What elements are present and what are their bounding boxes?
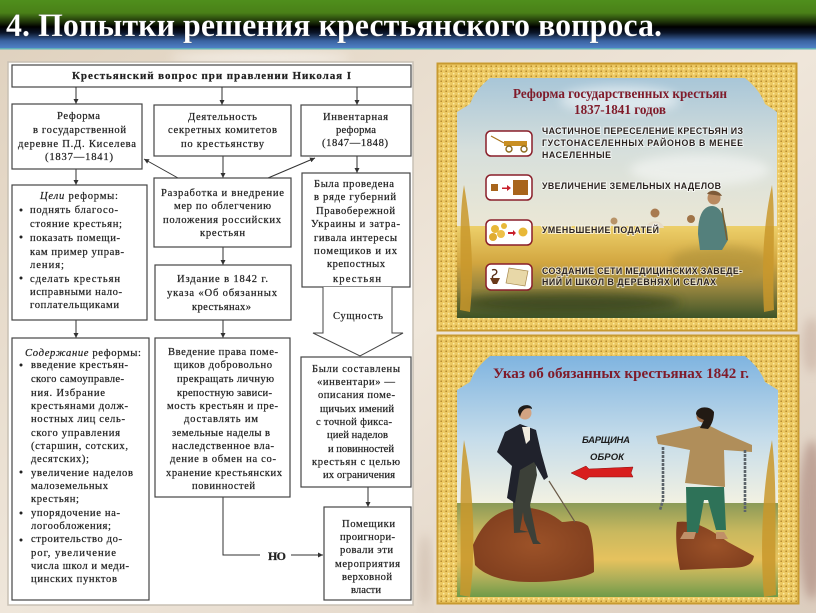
panel title: Указ об обязанных крестьянах 1842 г. bbox=[493, 366, 749, 382]
box: landlords' right: крепостную зависи- bbox=[177, 388, 272, 399]
box: landlords' right: повинностей bbox=[192, 481, 255, 492]
box: reform content: цинских пунктов bbox=[31, 574, 117, 585]
label: corvee and quitrent bbox=[582, 435, 630, 463]
diagram title: Крестьянский вопрос при правлении Николая I bbox=[72, 70, 351, 82]
frame corners and wheat bbox=[457, 356, 778, 597]
box: Kiselev reform: деревне П.Д. Киселева bbox=[18, 139, 136, 150]
box: landlords ignored bbox=[324, 507, 411, 600]
box: secret committees: Деятельность bbox=[188, 112, 257, 123]
diagram title bbox=[12, 65, 411, 87]
item: resettlement bbox=[486, 126, 743, 160]
soil plot: landlord bbox=[473, 508, 594, 582]
box: landlords ignored: верховной bbox=[342, 572, 392, 583]
box: landlords' right: дение в обмен на со- bbox=[170, 454, 276, 465]
label: but: НО bbox=[268, 549, 286, 563]
box: reform content: крестьян; bbox=[31, 494, 79, 505]
box: landlords' right bbox=[155, 338, 290, 497]
box: reform goals: ления; bbox=[30, 260, 64, 271]
box: secret committees: секретных комитетов bbox=[168, 125, 277, 136]
item: lower taxes bbox=[486, 220, 659, 245]
box: landlords' right: прекращать личную bbox=[177, 374, 274, 385]
box: inventories: Были составлены bbox=[312, 364, 400, 375]
box: 1842 decree: Издание в 1842 г. bbox=[177, 274, 268, 285]
item: hospitals and schools bbox=[486, 264, 742, 290]
box: Kiselev reform bbox=[12, 104, 142, 169]
box: carried out in provinces: гивала интересы bbox=[314, 233, 397, 244]
box: reform content: ского самоуправле- bbox=[31, 374, 124, 385]
box: reform content: ния. Избрание bbox=[31, 388, 105, 399]
box: 1842 decree: указа «Об обязанных bbox=[167, 288, 278, 299]
box: reform goals: показать помещи- bbox=[30, 233, 120, 244]
item: hospitals and schools: СОЗДАНИЕ СЕТИ МЕДИЦИНСКИХ ЗАВЕДЕ- bbox=[542, 266, 742, 276]
arrow: essence bbox=[313, 287, 403, 356]
item: lower taxes: УМЕНЬШЕНИЕ ПОДАТЕЙ bbox=[542, 224, 659, 235]
box: inventory reform: Инвентарная bbox=[323, 112, 388, 123]
frame corners and wheat bbox=[457, 78, 777, 312]
box: reform content: упорядочение на- bbox=[31, 508, 120, 519]
box: reform content: логообложения; bbox=[31, 521, 111, 532]
box: landlords ignored: проигнори- bbox=[340, 532, 395, 543]
box: reform goals: сделать крестьян bbox=[30, 274, 120, 285]
box: landlords ignored: ровали эти bbox=[340, 545, 393, 556]
box: 1842 decree: крестьянах» bbox=[192, 302, 251, 313]
scene: sky and fields bbox=[457, 356, 778, 597]
box: reform content: Содержание реформы: bbox=[25, 348, 141, 359]
box: carried out in provinces: в ряде губерний bbox=[314, 192, 396, 203]
icon: small to large square bbox=[486, 175, 532, 200]
box: landlords' right: земельные наделы в bbox=[172, 428, 270, 439]
figure: reaper bbox=[610, 191, 728, 250]
box: inventories: крестьян с целью bbox=[312, 457, 400, 468]
panel: state peasants reform bbox=[437, 63, 797, 331]
box: landlords' right: щиков добровольно bbox=[174, 360, 272, 371]
box: carried out in provinces: Украины и затра- bbox=[311, 219, 400, 230]
box: reform content: (старшин, сотских, bbox=[31, 441, 128, 452]
box: inventories: их ограничения bbox=[323, 470, 395, 481]
box: reform content: увеличение наделов bbox=[31, 468, 133, 479]
box: landlords' right: доставлять им bbox=[184, 414, 258, 425]
box: reform content: строительство до- bbox=[31, 534, 122, 545]
panel: peasant question diagram bbox=[8, 62, 413, 605]
panel title bbox=[513, 86, 727, 117]
arrows bbox=[76, 87, 368, 555]
box: Kiselev reform: Реформа bbox=[57, 111, 100, 122]
item: resettlement: НАСЕЛЕННЫЕ bbox=[542, 150, 611, 160]
item: hospitals and schools: НИЙ И ШКОЛ В ДЕРЕВНЯХ И СЕЛАХ bbox=[542, 276, 716, 287]
box: reform goals bbox=[12, 185, 147, 320]
box: reform content: числа школ и меди- bbox=[31, 561, 129, 572]
panel title: 1837-1841 годов bbox=[574, 102, 666, 117]
item: resettlement: ЧАСТИЧНОЕ ПЕРЕСЕЛЕНИЕ КРЕСТЬЯН ИЗ bbox=[542, 126, 743, 136]
figure: peasant in chains bbox=[656, 407, 752, 539]
box: development of measures bbox=[154, 178, 291, 247]
box: reform content: рог, увеличение bbox=[31, 548, 116, 559]
box: landlords ignored: Помещики bbox=[342, 519, 395, 530]
soil plot: peasant bbox=[676, 522, 754, 570]
box: reform goals: гоплательщиками bbox=[30, 300, 119, 311]
box: development of measures: крестьян bbox=[200, 228, 245, 239]
box: reform content: десятских); bbox=[31, 454, 89, 465]
box: landlords ignored: мероприятия bbox=[335, 559, 400, 570]
item: larger land allotments bbox=[486, 175, 721, 200]
box: inventories: щичьих имений bbox=[320, 404, 394, 415]
box: landlords' right: Введение права поме- bbox=[168, 347, 278, 358]
box: reform content bbox=[12, 338, 149, 600]
box: landlords' right: мость крестьян и пре- bbox=[167, 401, 278, 412]
box: inventories: описания поме- bbox=[318, 390, 395, 401]
box: development of measures: Разработка и внедрение bbox=[161, 188, 284, 199]
box: reform goals: исправными нало- bbox=[30, 287, 122, 298]
box: reform goals: стояние крестьян; bbox=[30, 219, 122, 230]
icon: medical bowl and book bbox=[486, 264, 532, 290]
box: 1842 decree bbox=[155, 265, 291, 320]
figure: landlord bbox=[497, 405, 575, 544]
box: inventory reform: (1847—1848) bbox=[322, 138, 388, 149]
box: landlords' right: наследственное вла- bbox=[172, 441, 274, 452]
box: inventories bbox=[301, 357, 411, 487]
label: corvee and quitrent: ОБРОК bbox=[590, 452, 625, 463]
box: inventories: с точной фикса- bbox=[316, 417, 392, 428]
box: secret committees bbox=[154, 105, 291, 156]
box: inventories: «инвентари» — bbox=[317, 377, 395, 388]
box: secret committees: по крестьянству bbox=[181, 139, 265, 150]
arrow: essence: Сущность bbox=[333, 311, 383, 322]
title: 4. Попытки решения крестьянского вопроса. bbox=[6, 8, 662, 44]
painting: sky and field bbox=[457, 78, 777, 318]
box: inventories: и повинностей bbox=[328, 444, 394, 455]
arrow: red left bbox=[571, 466, 633, 480]
box: inventory reform bbox=[301, 105, 411, 156]
icon: cart bbox=[486, 131, 532, 156]
box: reform content: крестьянами долж- bbox=[31, 401, 128, 412]
panel title: Реформа государственных крестьян bbox=[513, 86, 727, 101]
box: Kiselev reform: в государственной bbox=[33, 125, 126, 136]
box: inventories: цией наделов bbox=[327, 430, 388, 441]
box: reform content: малоземельных bbox=[31, 481, 109, 492]
box: reform goals: поднять благосо- bbox=[30, 205, 118, 216]
box: reform content: ского управления bbox=[31, 428, 120, 439]
box: carried out in provinces: крестьян bbox=[333, 274, 381, 285]
box: reform goals: Цели реформы: bbox=[39, 191, 118, 202]
box: landlords' right: хранение крестьянских bbox=[166, 468, 283, 479]
box: reform goals: кам пример управ- bbox=[30, 247, 124, 258]
icon: coins bbox=[486, 220, 532, 245]
box: carried out in provinces: крепостных bbox=[327, 259, 386, 270]
box: reform content: ностных лиц сель- bbox=[31, 414, 125, 425]
box: carried out in provinces bbox=[302, 173, 410, 287]
box: development of measures: мер по облегчению bbox=[174, 201, 271, 212]
item: larger land allotments: УВЕЛИЧЕНИЕ ЗЕМЕЛЬНЫХ НАДЕЛОВ bbox=[542, 181, 721, 191]
box: reform content: введение крестьян- bbox=[31, 360, 128, 371]
box: carried out in provinces: Была проведена bbox=[314, 179, 394, 190]
label: corvee and quitrent: БАРЩИНА bbox=[582, 435, 630, 446]
box: carried out in provinces: Правобережной bbox=[316, 206, 395, 217]
box: inventory reform: реформа bbox=[336, 125, 376, 136]
panel: 1842 decree bbox=[437, 335, 799, 604]
box: Kiselev reform: (1837—1841) bbox=[45, 152, 113, 163]
box: carried out in provinces: помещиков и их bbox=[314, 246, 398, 257]
item: resettlement: ГУСТОНАСЕЛЕННЫХ РАЙОНОВ В МЕНЕЕ bbox=[542, 137, 743, 148]
header band bbox=[0, 0, 816, 50]
box: landlords ignored: власти bbox=[351, 585, 381, 596]
box: development of measures: положения российских bbox=[163, 215, 282, 226]
